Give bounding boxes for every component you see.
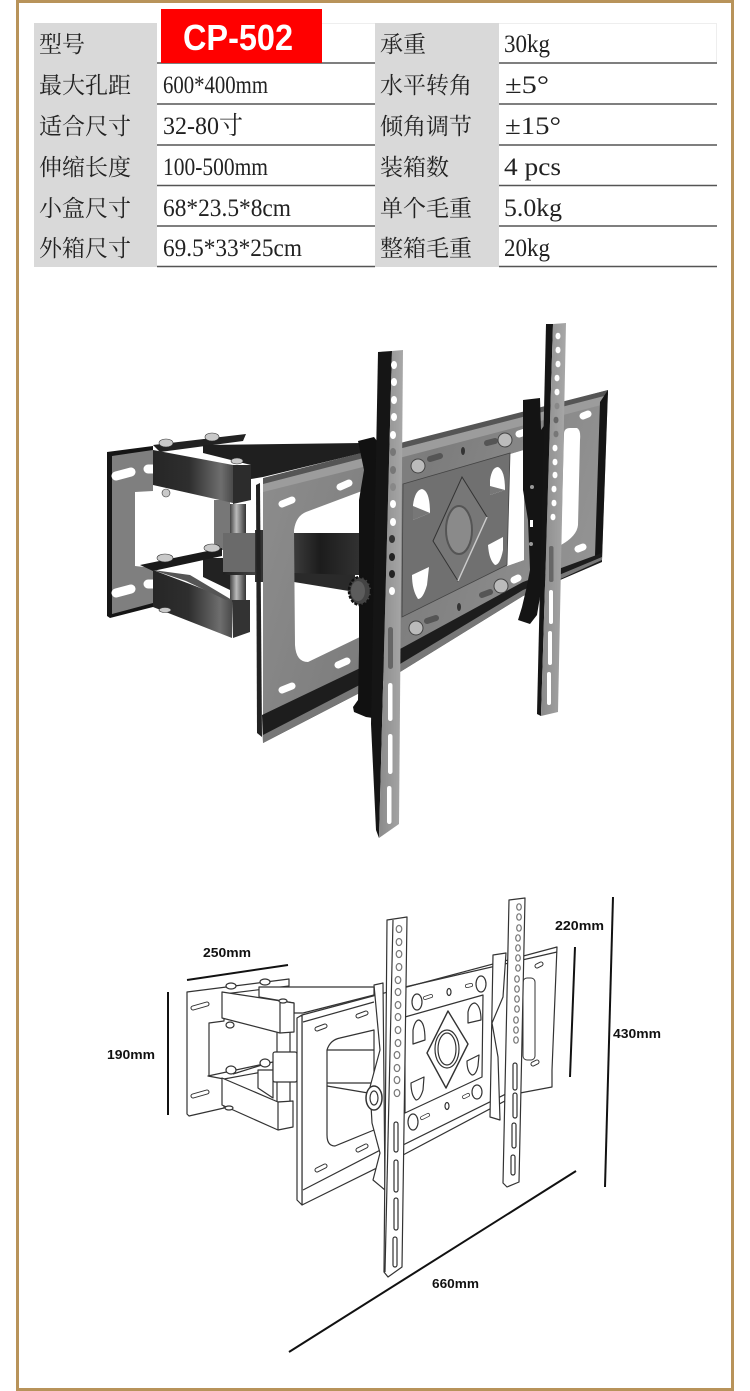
outline: swing arms: [208, 979, 374, 1130]
specification table: 倾角调节: [380, 108, 472, 141]
line drawing of the mount: [187, 898, 557, 1277]
specification table: 30kg: [504, 31, 550, 58]
specification table: 整箱毛重: [380, 230, 472, 263]
specification table: [34, 23, 717, 267]
dimension: 430mm: 430mm: [613, 1026, 661, 1041]
dimension: 250mm: 250mm: [203, 945, 251, 960]
dimension: 660mm: [289, 1171, 576, 1352]
specification table: 最大孔距: [39, 67, 131, 100]
model badge: CP-502: [183, 17, 293, 58]
outline: left bracket: [366, 917, 407, 1277]
specification table: 单个毛重: [380, 190, 472, 223]
left bracket holes: [387, 361, 397, 824]
left vertical bracket: [349, 350, 403, 838]
outline: centre plate: [405, 976, 486, 1130]
specification table: 69.5*33*25cm: [163, 235, 303, 262]
specification table: 小盒尺寸: [39, 190, 131, 223]
main frame plate: [256, 390, 608, 743]
specification table: 100-500mm: [163, 154, 268, 181]
right bracket holes: [547, 333, 560, 705]
specification table: 伸缩长度: [39, 149, 131, 182]
model badge: [161, 9, 322, 63]
specification table: 适合尺寸: [39, 108, 131, 141]
centre VESA plate: [402, 433, 512, 635]
dimension: 250mm: [187, 945, 288, 980]
right vertical bracket: [518, 323, 566, 716]
dimension: 220mm: [555, 918, 604, 1077]
specification table: ±15°: [505, 113, 561, 140]
dimension: 190mm: [107, 992, 168, 1115]
specification table: 外箱尺寸: [39, 230, 131, 263]
dimension: 190mm: 190mm: [107, 1047, 155, 1062]
outline: wall plate: [187, 979, 289, 1116]
specification table: ±5°: [505, 72, 549, 99]
outline: main frame: [297, 947, 557, 1205]
bolts: [157, 433, 243, 612]
dimension: 220mm: 220mm: [555, 918, 604, 933]
dimension: 660mm: 660mm: [432, 1276, 479, 1291]
specification table: 20kg: [504, 235, 550, 262]
specification table: 装箱数: [380, 149, 449, 182]
dimension: 430mm: [605, 897, 661, 1187]
outline: right bracket: [490, 898, 525, 1187]
wall plate: [107, 434, 246, 618]
specification table: 600*400mm: [163, 72, 268, 99]
product photo: TV wall mount: [107, 323, 608, 838]
swing arms and pivot: [140, 443, 362, 638]
specification table: 32-80寸: [163, 112, 243, 140]
specification table: 承重: [380, 26, 426, 59]
specification table: 4 pcs: [504, 154, 561, 181]
specification table: 水平转角: [380, 67, 472, 100]
specification table: 型号: [39, 26, 85, 59]
specification table: 5.0kg: [504, 195, 563, 222]
specification table: 68*23.5*8cm: [163, 195, 292, 222]
